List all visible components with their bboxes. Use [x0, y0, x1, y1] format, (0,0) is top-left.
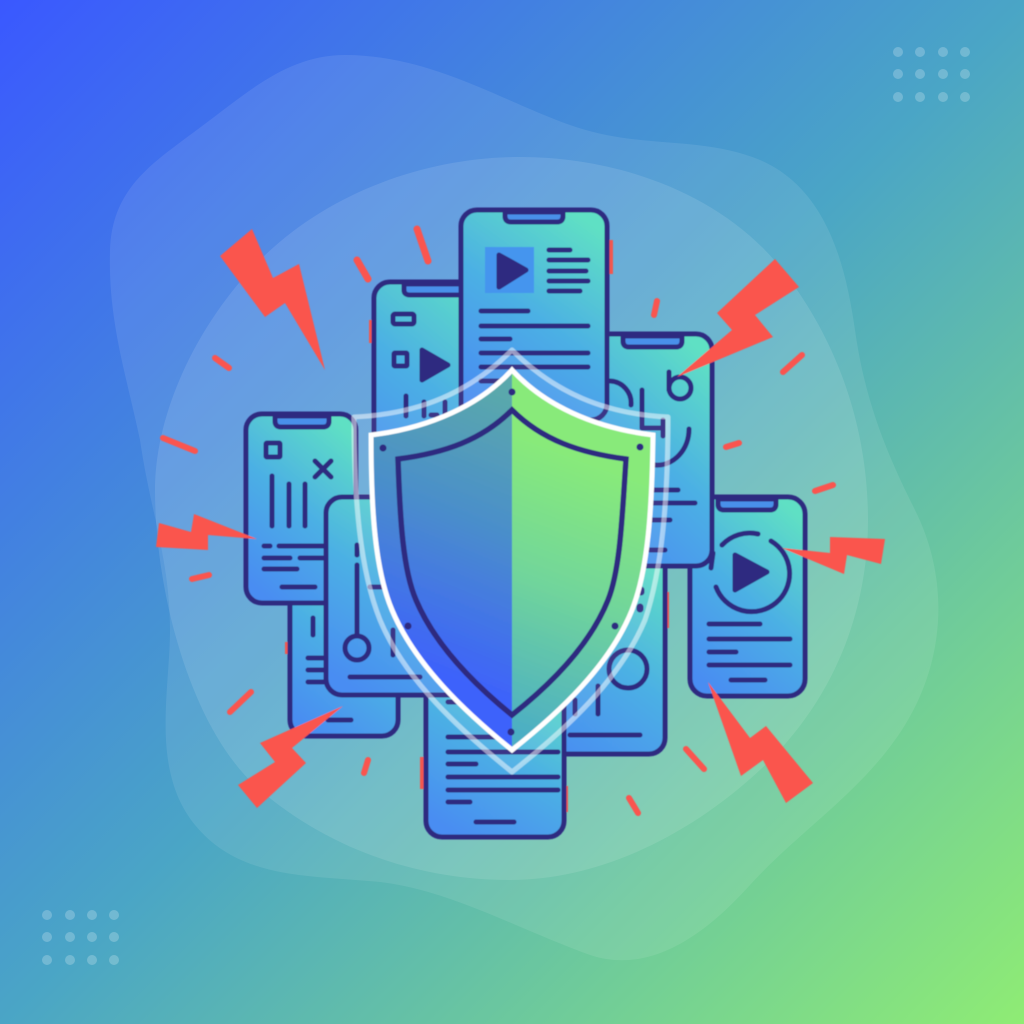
shield left half — [373, 374, 513, 747]
phone: lower right — [520, 540, 665, 754]
phone: far right — [690, 497, 805, 696]
side buttons — [287, 240, 667, 812]
background blob: outer — [110, 55, 938, 960]
phone: left — [246, 414, 356, 603]
spark dashes — [163, 229, 833, 813]
lightning bolts — [156, 229, 885, 808]
main shield — [371, 370, 653, 750]
bolt: lower left — [238, 706, 343, 808]
glass shield outline — [354, 350, 668, 772]
shield white border — [371, 370, 653, 750]
illustration group — [156, 210, 885, 837]
bolt: right — [782, 537, 885, 574]
dot grid: top right — [893, 47, 970, 102]
bolt: top right — [677, 259, 799, 377]
phone: top centre — [461, 210, 607, 420]
bolt: left — [156, 514, 257, 550]
bolt: top left — [220, 229, 325, 370]
phone: lower left back — [290, 560, 398, 736]
shield rivets — [380, 388, 644, 736]
phone: bottom centre — [426, 660, 564, 837]
dot grid: bottom left — [42, 910, 119, 965]
shield inner outline — [398, 410, 626, 715]
phone: left centre — [326, 497, 476, 695]
phone: upper left — [374, 282, 514, 512]
bolt: lower right — [708, 682, 813, 803]
background blob: inner — [155, 157, 868, 880]
phone: right upper — [590, 334, 712, 566]
shield right half — [511, 374, 651, 746]
